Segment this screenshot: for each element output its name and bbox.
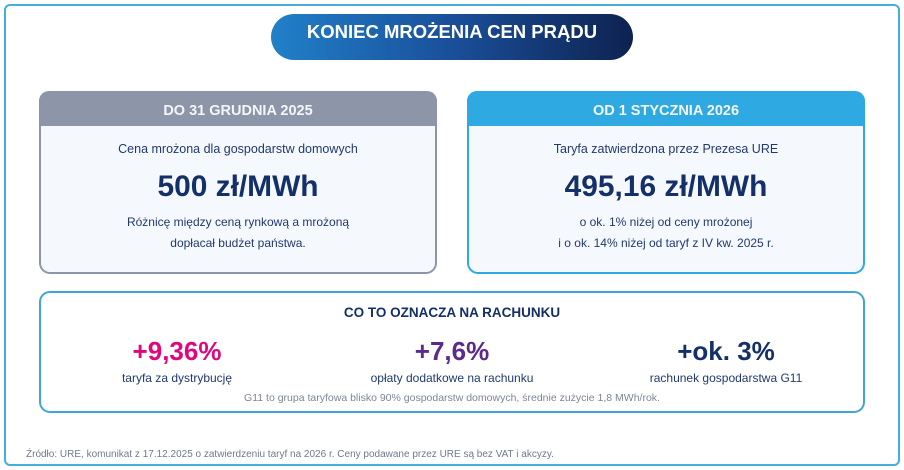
stat label: opłaty dodatkowe na rachunku [371, 371, 533, 385]
panel: od 1 stycznia 2026 [467, 91, 865, 274]
big number: price: 500 zł/MWh [157, 170, 319, 203]
panel: do 31 grudnia 2025 [39, 91, 437, 274]
panel heading [39, 91, 437, 126]
stat value: +7,6% [415, 336, 489, 366]
stat label: rachunek gospodarstwa G11 [650, 371, 802, 385]
title pill: KONIEC MROŻENIA CEN PRĄDU [307, 21, 597, 42]
title pill [271, 14, 633, 60]
text: comparison note: i o ok. 14% niżej od taryf z IV kw. 2025 r. [558, 236, 774, 250]
stat: distribution [122, 336, 232, 385]
text: tariff description: Taryfa zatwierdzona przez Prezesa URE [554, 142, 778, 156]
text: budget note: Różnicę między ceną rynkową a mrożoną [127, 215, 349, 229]
panel heading: DO 31 GRUDNIA 2025 [163, 103, 313, 119]
note: G11 definition: G11 to grupa taryfowa blisko 90% gospodarstw domowych, średnie zużycie 1,8 MWh/rok. [244, 392, 660, 404]
stat value: +9,36% [133, 336, 221, 366]
text: comparison note: o ok. 1% niżej od ceny mrożonej [580, 215, 752, 229]
panel: co to oznacza na rachunku [39, 291, 865, 413]
text: budget note: dopłacał budżet państwa. [170, 236, 306, 250]
stat: additional fees [371, 336, 533, 385]
text: comparison note [558, 215, 774, 250]
panel heading: CO TO OZNACZA NA RACHUNKU [344, 305, 560, 320]
text: price description: Cena mrożona dla gospodarstw domowych [118, 142, 358, 156]
stat: G11 bill [650, 336, 802, 385]
stat value: +ok. 3% [677, 336, 775, 366]
panel heading [467, 91, 865, 126]
panel heading: OD 1 STYCZNIA 2026 [593, 103, 739, 119]
text: budget note [127, 215, 350, 250]
stat label: taryfa za dystrybucję [122, 371, 232, 385]
big number: tariff: 495,16 zł/MWh [565, 170, 767, 203]
source note: Źródło: URE, komunikat z 17.12.2025 o zatwierdzeniu taryf na 2026 r. Ceny podawane przez URE są bez VAT i akcyzy. [26, 449, 554, 460]
